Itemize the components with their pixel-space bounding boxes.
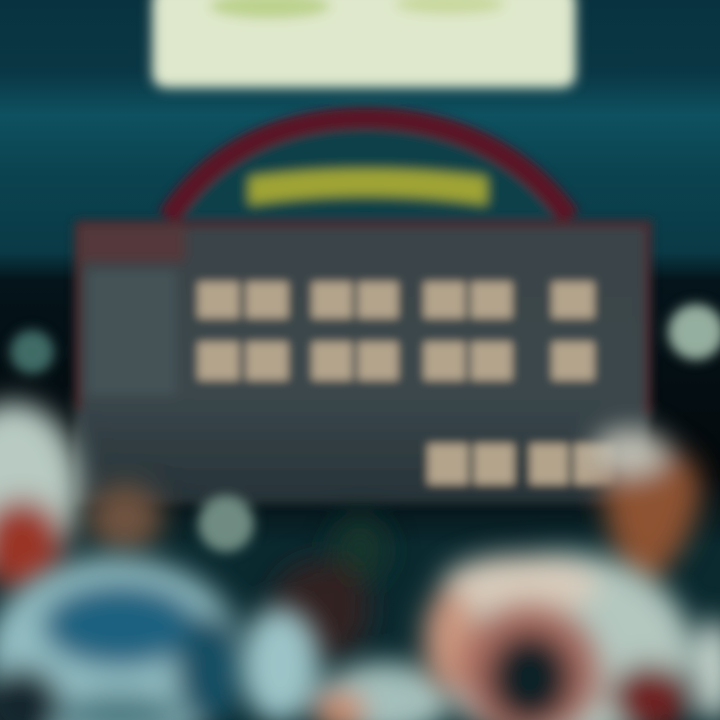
scoreboard panel	[76, 222, 648, 504]
floating balls	[10, 304, 720, 552]
small figures in the crowd	[87, 484, 388, 660]
score digits	[198, 282, 614, 484]
scoreboard title	[248, 168, 488, 206]
ball and figure at right	[592, 428, 700, 590]
scoreboard arch	[168, 118, 570, 218]
bright screen at top	[152, 0, 576, 88]
foreground ball right	[424, 552, 720, 720]
foreground ball left	[0, 557, 244, 720]
large ball left	[0, 402, 80, 591]
foreground ball centre	[240, 607, 451, 720]
